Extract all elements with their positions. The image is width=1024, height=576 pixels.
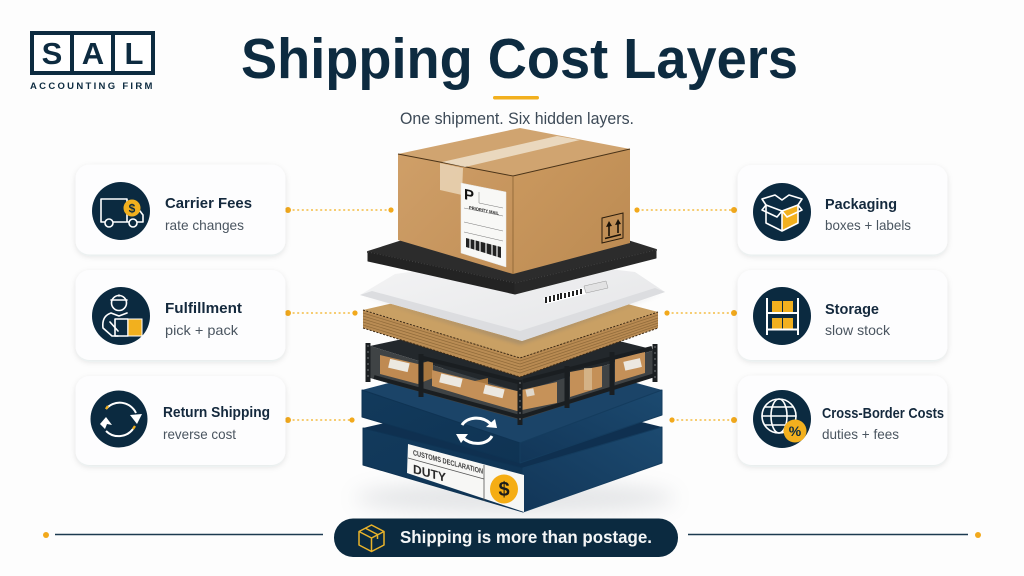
shipping label: P — [464, 186, 474, 205]
icon: white refresh arrows — [456, 418, 497, 443]
icon: circular return arrows — [90, 390, 148, 448]
customs declaration label — [407, 444, 524, 512]
connector: packaging — [634, 207, 737, 213]
footer callout pill — [334, 518, 678, 557]
connector: storage — [664, 310, 737, 316]
footer rule right — [688, 532, 981, 538]
panel: cross-border costs: Cross-Border Costs — [822, 405, 944, 422]
panel: fulfillment: Fulfillment — [165, 300, 242, 317]
icon: storage shelf with boxes — [753, 287, 811, 345]
logo: SAL Accounting Firm — [30, 33, 155, 92]
footer callout pill: Shipping is more than postage. — [400, 527, 652, 547]
panel: storage: slow stock — [825, 322, 891, 338]
shipping label — [461, 183, 506, 267]
this way up mark — [602, 213, 623, 243]
panel: fulfillment: pick + pack — [165, 322, 239, 338]
icon: globe with percent badge: % — [789, 423, 802, 439]
title: Shipping Cost Layers — [241, 27, 798, 91]
panel: storage — [738, 270, 948, 360]
layer: customs duty slab — [363, 392, 662, 512]
subtitle: One shipment. Six hidden layers. — [400, 110, 634, 128]
panel: packaging: Packaging — [825, 196, 897, 213]
panel: packaging — [738, 165, 948, 254]
icon: globe with percent badge — [753, 390, 811, 448]
logo: SAL Accounting Firm: A — [82, 36, 104, 71]
icon: truck with dollar coin: $ — [129, 202, 136, 216]
logo: SAL Accounting Firm: ACCOUNTING FIRM — [30, 81, 155, 92]
panel: cross-border costs — [738, 376, 948, 465]
icon: warehouse worker with box — [92, 287, 150, 345]
connector: cross-border costs — [669, 417, 737, 423]
layer: black foam pad — [368, 205, 656, 294]
logo: SAL Accounting Firm: S — [42, 36, 62, 71]
icon: open box — [753, 183, 811, 241]
packing tape — [442, 136, 580, 167]
stack ground shadow — [355, 482, 675, 514]
customs declaration label: CUSTOMS DECLARATION — [413, 448, 483, 476]
shipping label: PRIORITY MAIL — [469, 205, 499, 216]
title underline accent — [493, 96, 539, 100]
connector: return shipping — [285, 417, 355, 423]
panel: return shipping: reverse cost — [163, 426, 236, 442]
panel: return shipping — [76, 376, 286, 465]
layer: storage shelf with boxes — [368, 315, 655, 425]
footer rule left — [43, 532, 323, 538]
icon: truck with dollar coin — [92, 182, 150, 240]
shelf boxes — [380, 352, 645, 411]
customs declaration label: $ — [498, 479, 510, 501]
panel: cross-border costs: duties + fees — [822, 426, 899, 442]
layer: corrugated cardboard — [363, 275, 658, 377]
connector: fulfillment — [285, 310, 358, 316]
panel: packaging: boxes + labels — [825, 217, 911, 233]
layer: white poly mailer — [360, 258, 665, 344]
panel: carrier fees: rate changes — [165, 217, 244, 233]
mailer barcode — [543, 281, 608, 304]
shelf rails and posts — [368, 343, 655, 425]
layer: return shipping slab — [362, 350, 662, 463]
panel: carrier fees: Carrier Fees — [165, 195, 252, 212]
logo: SAL Accounting Firm: L — [125, 36, 143, 71]
panel: carrier fees — [76, 164, 286, 254]
icon: outlined box — [359, 525, 384, 552]
layer: cardboard box — [398, 128, 630, 274]
panel: fulfillment — [76, 270, 286, 360]
customs declaration label: DUTY — [413, 461, 446, 485]
panel: storage: Storage — [825, 301, 879, 318]
panel: return shipping: Return Shipping — [163, 404, 270, 421]
connector: carrier fees — [285, 207, 394, 213]
